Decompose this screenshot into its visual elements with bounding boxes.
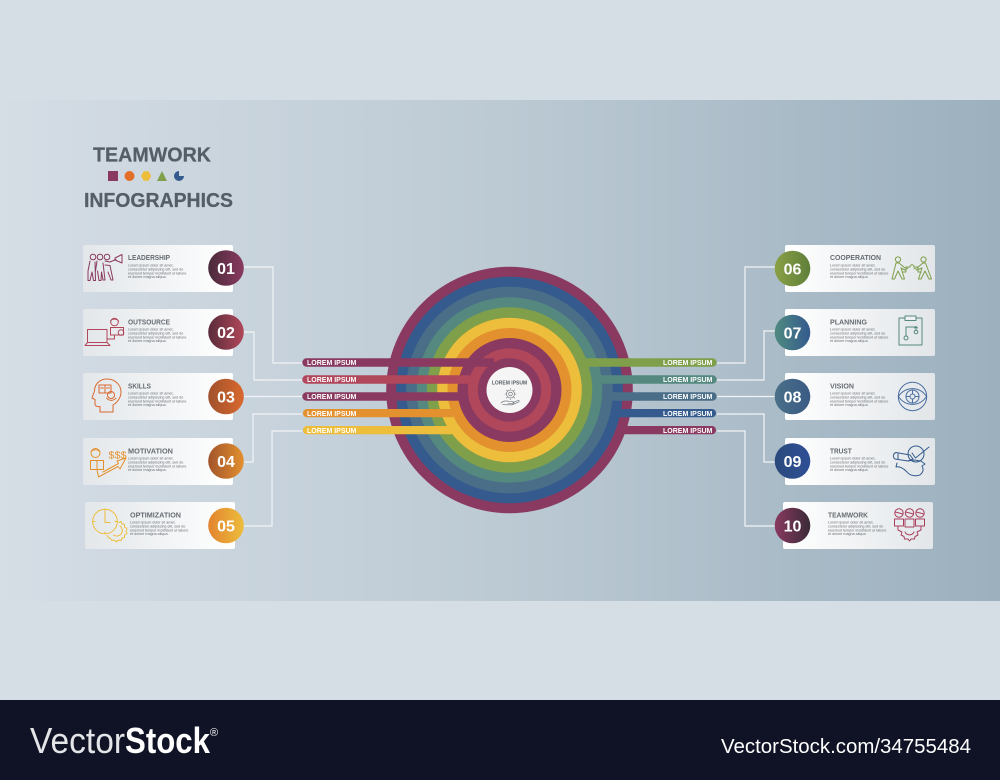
left label band 1: LOREM IPSUM (307, 360, 357, 367)
body text: Lorem ipsum dolor sit amet, (828, 520, 874, 524)
left label band 5 (303, 426, 452, 435)
left label band 2 (302, 375, 470, 384)
body text: eiusmod tempor incididunt ut labore (828, 528, 886, 532)
heading: leadership: LEADERSHIP (128, 253, 170, 262)
concentric ring chart (386, 267, 633, 513)
body text: consectetur adipiscing elit, sed do (128, 267, 183, 271)
icon: handshake with check (894, 446, 929, 476)
heading: skills: SKILLS (128, 382, 151, 390)
body text: Lorem ipsum dolor sit amet, (128, 328, 174, 332)
body text: Lorem ipsum dolor sit amet, (830, 264, 876, 268)
panel: 01 leadership (83, 245, 244, 292)
number badge 07: 07 (784, 326, 802, 342)
body text: Lorem ipsum dolor sit amet, (830, 328, 876, 332)
icon: motivation person and money (90, 448, 126, 477)
panel: 07 planning (775, 309, 935, 356)
panel: 03 skills (83, 373, 244, 420)
body text: eiusmod tempor incididunt ut labore (130, 528, 188, 532)
footer logo: ® (210, 727, 218, 739)
body text: eiusmod tempor incididunt ut labore (128, 271, 186, 275)
body text: eiusmod tempor incididunt ut labore (128, 464, 186, 468)
number badge 02 (208, 314, 244, 350)
number badge 09 (775, 443, 810, 479)
heading: cooperation: COOPERATION (830, 253, 881, 262)
body text: consectetur adipiscing elit, sed do (130, 524, 185, 528)
body text: eiusmod tempor incididunt ut labore (830, 335, 888, 339)
icon: two people with puzzle (892, 257, 932, 279)
body text: et dolore magna aliqua. (830, 468, 869, 472)
number badge 01: 01 (217, 261, 235, 278)
number badge 08 (775, 379, 810, 414)
left label band 2: LOREM IPSUM (307, 377, 357, 384)
footer logo: Vector (30, 720, 125, 761)
panel: 04 motivation (83, 438, 244, 485)
number badge 08: 08 (784, 390, 802, 406)
body text (130, 520, 188, 536)
right label band 7: LOREM IPSUM (663, 377, 713, 384)
body text: consectetur adipiscing elit, sed do (830, 395, 885, 399)
number badge 04 (208, 443, 244, 479)
panel: 05 optimization (85, 502, 244, 549)
icon: eye in circle (898, 382, 927, 411)
center hub (486, 367, 532, 413)
body text: Lorem ipsum dolor sit amet, (130, 520, 176, 524)
footer logo (30, 720, 218, 761)
panel: 09 trust (775, 438, 935, 485)
body text: et dolore magna aliqua. (128, 403, 167, 407)
body text: eiusmod tempor incididunt ut labore (830, 271, 888, 275)
number badge 05 (208, 508, 244, 543)
title (84, 144, 233, 212)
body text: Lorem ipsum dolor sit amet, (830, 392, 876, 396)
number badge 03 (208, 379, 244, 414)
number badge 06 (775, 251, 810, 286)
icon text: dollar signs: $$$ (108, 450, 127, 462)
icon: leadership megaphone team (88, 254, 122, 280)
right label band 10 (622, 426, 716, 435)
right label band 6 (585, 358, 717, 367)
body text: consectetur adipiscing elit, sed do (128, 331, 183, 335)
right label band 6: LOREM IPSUM (663, 360, 713, 367)
body text: Lorem ipsum dolor sit amet, (128, 456, 174, 460)
heading: motivation: MOTIVATION (128, 446, 173, 456)
body text: Lorem ipsum dolor sit amet, (128, 392, 174, 396)
body text (128, 328, 186, 343)
body text: et dolore magna aliqua. (128, 275, 167, 279)
heading: optimization: OPTIMIZATION (130, 510, 181, 520)
number badge 02: 02 (217, 325, 235, 342)
body text: et dolore magna aliqua. (830, 275, 869, 279)
number badge 10 (775, 508, 810, 543)
left label band 3: LOREM IPSUM (307, 394, 357, 401)
icon: team of three over gear (894, 509, 924, 541)
body text: eiusmod tempor incididunt ut labore (830, 464, 888, 468)
icon: outsource laptop and person (85, 318, 124, 346)
body text: consectetur adipiscing elit, sed do (128, 395, 183, 399)
heading: infographics: INFOGRAPHICS (84, 189, 233, 212)
body text: consectetur adipiscing elit, sed do (828, 524, 883, 528)
icon: skills head (92, 379, 121, 412)
number badge 10: 10 (784, 518, 802, 536)
body text (830, 392, 888, 407)
body text: et dolore magna aliqua. (128, 468, 167, 472)
number badge 03: 03 (217, 390, 235, 406)
panel: 06 cooperation (775, 245, 935, 292)
panel: 08 vision (775, 373, 935, 420)
body text (128, 456, 186, 472)
body text (128, 264, 186, 279)
body text (830, 456, 888, 472)
heading: teamwork: TEAMWORK (828, 510, 869, 520)
body text (828, 520, 886, 536)
connector lines (244, 267, 775, 526)
panel: 10 teamwork (775, 502, 933, 549)
number badge 01 (208, 250, 244, 286)
body text: consectetur adipiscing elit, sed do (830, 331, 885, 335)
right label band 8: LOREM IPSUM (663, 394, 713, 401)
icon: clock and gear (93, 509, 127, 542)
right label band 10: LOREM IPSUM (663, 428, 713, 435)
decorative shape row (108, 171, 184, 181)
footer logo: Stock (125, 720, 211, 761)
heading: trust: TRUST (830, 446, 852, 456)
body text: consectetur adipiscing elit, sed do (128, 460, 183, 464)
body text: Lorem ipsum dolor sit amet, (830, 456, 876, 460)
heading: outsource: OUTSOURCE (128, 318, 170, 326)
left label band 4 (303, 409, 453, 418)
gradient backdrop panel (0, 100, 1000, 601)
body text: consectetur adipiscing elit, sed do (830, 460, 885, 464)
number badge 05: 05 (217, 518, 235, 536)
heading: teamwork: TEAMWORK (93, 144, 211, 166)
footer bar (0, 700, 1000, 780)
body text (830, 264, 888, 279)
body text: et dolore magna aliqua. (830, 403, 869, 407)
body text: et dolore magna aliqua. (830, 339, 869, 343)
heading: planning: PLANNING (830, 318, 867, 326)
footer image id: VectorStock.com/34755484 (721, 736, 971, 758)
body text: et dolore magna aliqua. (128, 339, 167, 343)
number badge 04: 04 (217, 454, 235, 471)
body text: consectetur adipiscing elit, sed do (830, 267, 885, 271)
body text: eiusmod tempor incididunt ut labore (128, 335, 186, 339)
right label band 7 (598, 375, 717, 384)
center hub: LOREM IPSUM (492, 380, 527, 386)
number badge 07 (775, 315, 810, 350)
body text: et dolore magna aliqua. (828, 532, 867, 536)
right label band 9: LOREM IPSUM (663, 411, 713, 418)
body text (128, 392, 186, 407)
number badge 09: 09 (784, 454, 802, 471)
left label band 1 (302, 358, 494, 367)
body text: Lorem ipsum dolor sit amet, (128, 264, 174, 268)
body text (830, 328, 888, 343)
left label band 4: LOREM IPSUM (307, 411, 357, 418)
left label band 3 (302, 392, 460, 401)
body text: et dolore magna aliqua. (130, 532, 169, 536)
right label band 9 (615, 409, 716, 418)
body text: eiusmod tempor incididunt ut labore (128, 399, 186, 403)
icon: clipboard plan (899, 316, 922, 345)
right label band 8 (608, 392, 717, 401)
left label band 5: LOREM IPSUM (307, 428, 357, 435)
panel: 02 outsource (83, 309, 244, 356)
number badge 06: 06 (784, 262, 802, 278)
body text: eiusmod tempor incididunt ut labore (830, 399, 888, 403)
icon: gear in hand (501, 388, 519, 405)
heading: vision: VISION (830, 382, 854, 390)
